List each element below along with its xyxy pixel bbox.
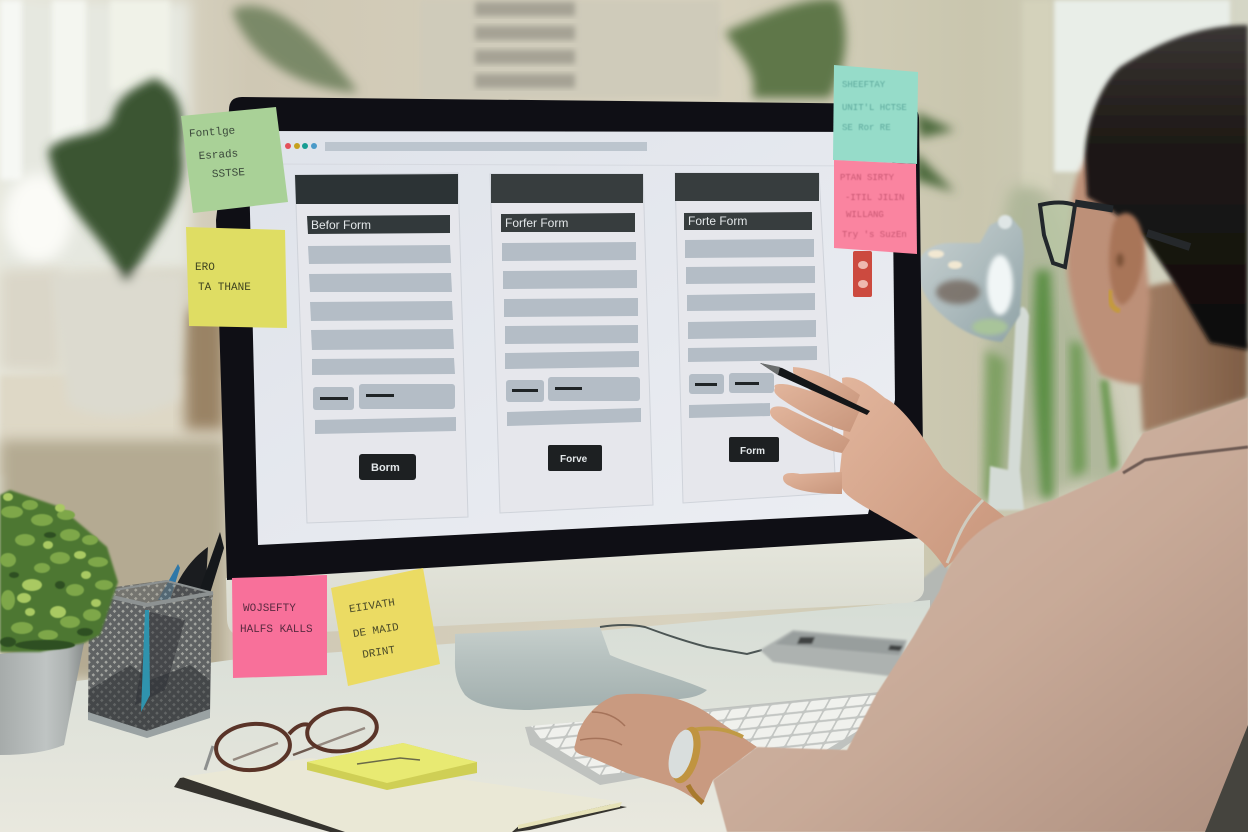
- wristwatch: [664, 724, 743, 803]
- pen holder: [88, 532, 224, 738]
- person: [574, 25, 1248, 832]
- sticky note: green: Fontlge: [189, 126, 236, 141]
- background plant: centre top: [232, 0, 955, 192]
- sticky note: teal: [833, 65, 918, 164]
- potted plant: [0, 490, 118, 755]
- raised hand and fingers: [770, 367, 1005, 568]
- side toolbar on screen: [853, 251, 872, 297]
- form column: forte: Form: [740, 446, 765, 457]
- desk surface: [0, 600, 930, 832]
- screen: [248, 131, 895, 545]
- sticky note: yellow bottom: EIIVATH: [348, 597, 396, 616]
- sticky note: green: Esrads: [198, 148, 239, 163]
- form column: before: Befor Form: [311, 218, 371, 232]
- desk lamp: [885, 215, 1029, 622]
- stylus: [760, 363, 870, 415]
- lower hand on keyboard: [574, 694, 757, 803]
- sticky note: pink right: PTAN SIRTY: [840, 173, 895, 183]
- sticky note: pink right: WILLANG: [846, 210, 884, 220]
- glasses on desk: [205, 704, 380, 773]
- background plant: right of monitor: [984, 186, 1121, 500]
- sticky note: green: SSTSE: [212, 167, 246, 181]
- neck: [1100, 280, 1248, 433]
- form column: after: Forfer Form: [505, 216, 568, 230]
- sticky note: pink bottom: WOJSEFTY: [243, 603, 296, 615]
- keyboard: [525, 692, 890, 785]
- sticky note: yellow left: TA THANE: [198, 282, 251, 294]
- spectacles: [1040, 202, 1190, 267]
- monitor bezel: [216, 97, 924, 580]
- sticky note: pink bottom: [232, 575, 327, 678]
- face: [1067, 150, 1150, 383]
- form column: before: [295, 173, 468, 523]
- sticky note: teal: SHEEFTAY: [842, 80, 886, 90]
- earring: [1110, 290, 1120, 311]
- sticky note: teal: UNIT'L HCTSE: [842, 103, 907, 113]
- monitor: [216, 97, 924, 710]
- monitor stand: [455, 627, 707, 710]
- background plant: left: [48, 78, 185, 416]
- form column: forte: Forte Form: [688, 214, 747, 228]
- form column: forte: [675, 173, 836, 503]
- sticky note: yellow bottom: DE MAID: [352, 622, 400, 641]
- browser chrome: [250, 142, 890, 166]
- sticky note: pink right: [834, 160, 917, 254]
- monitor chin: [226, 538, 924, 636]
- sticky note: yellow bottom: DRINT: [362, 645, 396, 662]
- sticky note: yellow left: [186, 227, 287, 328]
- sticky note: pink right: -ITIL JILIN: [845, 193, 904, 203]
- sticky note: pink right: Try 's SuzEn: [842, 230, 907, 240]
- form column: before: Borm: [371, 462, 400, 474]
- sticky note: green: [181, 107, 288, 213]
- cable: [600, 625, 762, 654]
- collar line: [1123, 447, 1248, 473]
- desk phone device: [760, 630, 907, 677]
- form column: after: [490, 174, 653, 513]
- hair: [1085, 25, 1248, 350]
- sticky pad on notebook: [307, 743, 477, 790]
- notebook: [174, 758, 627, 832]
- ear: [1109, 213, 1143, 305]
- chair: [1205, 725, 1248, 832]
- sticky note: yellow left: ERO: [195, 262, 215, 274]
- sticky note: yellow bottom: [331, 568, 440, 686]
- sticky note: pink bottom: HALFS KALLS: [240, 624, 313, 636]
- sticky note: teal: SE Ror RE: [842, 123, 891, 133]
- bracelet: [947, 500, 983, 563]
- jacket: [713, 398, 1248, 832]
- form column: after: Forve: [560, 454, 588, 465]
